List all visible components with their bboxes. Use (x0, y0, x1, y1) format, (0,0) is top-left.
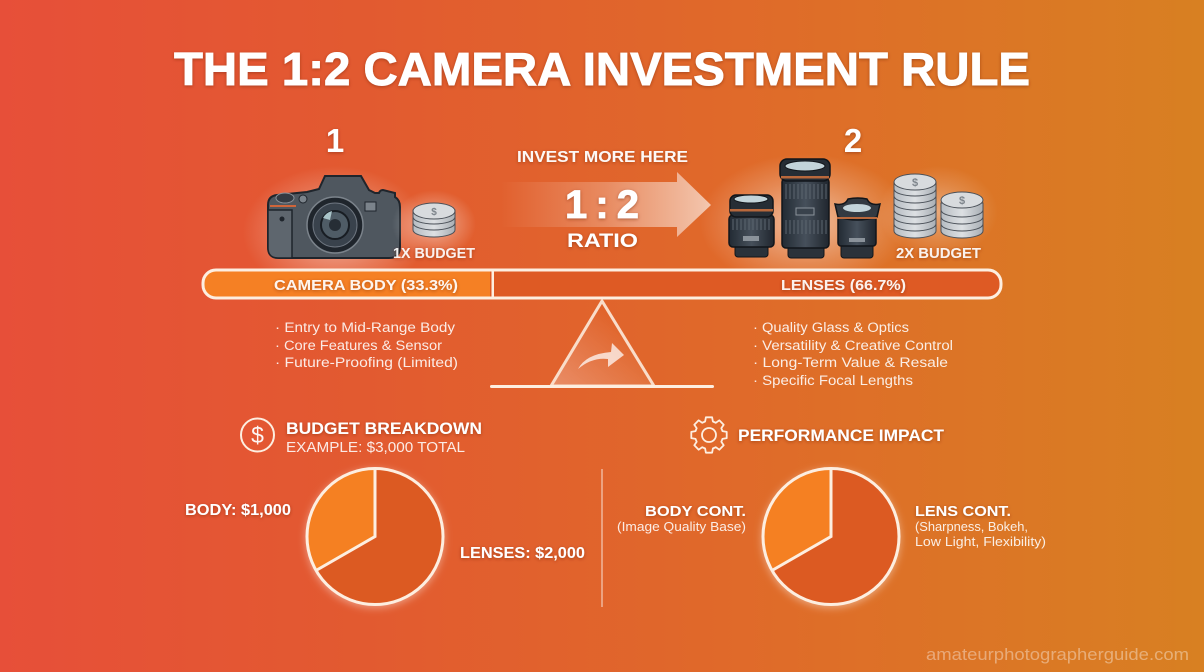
tall coin stack: $ (912, 177, 918, 189)
balance bar (203, 270, 1001, 298)
label: lens contribution: (Sharpness, Bokeh, (915, 520, 1028, 534)
icon: three lenses (700, 154, 910, 290)
icon: dollar circle: $ (251, 422, 264, 448)
lens 3 (835, 198, 880, 258)
label: lens contribution: Low Light, Flexibility) (915, 535, 1046, 549)
icon: camera (243, 166, 427, 298)
watermark: amateurphotographerguide.com (926, 645, 1189, 664)
arrow (500, 172, 711, 237)
pie: performance impact (763, 468, 899, 604)
number 1: 1 (326, 122, 344, 159)
camera body bullet list: · Core Features & Sensor (275, 338, 443, 353)
label: body contribution (617, 503, 746, 534)
icon: coin stack 1x: $ (431, 207, 437, 218)
divider (601, 469, 603, 607)
subheading: example total: EXAMPLE: $3,000 TOTAL (286, 439, 465, 456)
label: 1x budget: 1X BUDGET (393, 245, 475, 262)
title: THE 1:2 CAMERA INVESTMENT RULE (174, 43, 1030, 95)
label: body contribution: BODY CONT. (645, 503, 746, 520)
lenses bullet list: · Quality Glass & Optics (753, 320, 909, 335)
bar label: camera body: CAMERA BODY (33.3%) (274, 278, 458, 294)
icon: coin stack 1x (392, 190, 476, 258)
lens 2 (780, 159, 830, 258)
icon: dollar circle (241, 418, 274, 452)
lenses bullet list: · Versatility & Creative Control (753, 338, 953, 353)
fulcrum (490, 301, 714, 388)
label: invest more here: INVEST MORE HERE (517, 149, 688, 166)
icon: curved arrow (578, 343, 624, 369)
label: body contribution: (Image Quality Base) (617, 520, 746, 534)
camera body bullet list (275, 320, 458, 370)
label: lenses $2,000: LENSES: $2,000 (460, 545, 585, 562)
pie: budget breakdown (307, 468, 443, 604)
bar label: lenses: LENSES (66.7%) (781, 278, 906, 294)
lenses bullet list (753, 320, 953, 388)
icon: gear (691, 417, 727, 453)
short coin stack: $ (959, 195, 965, 207)
label: 2x budget: 2X BUDGET (896, 245, 981, 262)
heading: performance impact: PERFORMANCE IMPACT (738, 426, 945, 445)
lenses bullet list: · Specific Focal Lengths (753, 373, 913, 388)
ratio 1:2: 1 : 2 (565, 183, 639, 227)
label: lens contribution: LENS CONT. (915, 503, 1011, 520)
camera body bullet list: · Entry to Mid-Range Body (275, 320, 455, 335)
label: lens contribution (915, 503, 1046, 549)
icon: coin stacks 2x (878, 166, 998, 258)
lenses bullet list: · Long-Term Value & Resale (753, 355, 948, 370)
camera body bullet list: · Future-Proofing (Limited) (275, 355, 458, 370)
heading: budget breakdown: BUDGET BREAKDOWN (286, 419, 482, 438)
lens 1 (729, 195, 774, 257)
label: body $1,000: BODY: $1,000 (185, 502, 291, 519)
number 2: 2 (844, 122, 862, 159)
label: ratio: RATIO (567, 231, 638, 252)
